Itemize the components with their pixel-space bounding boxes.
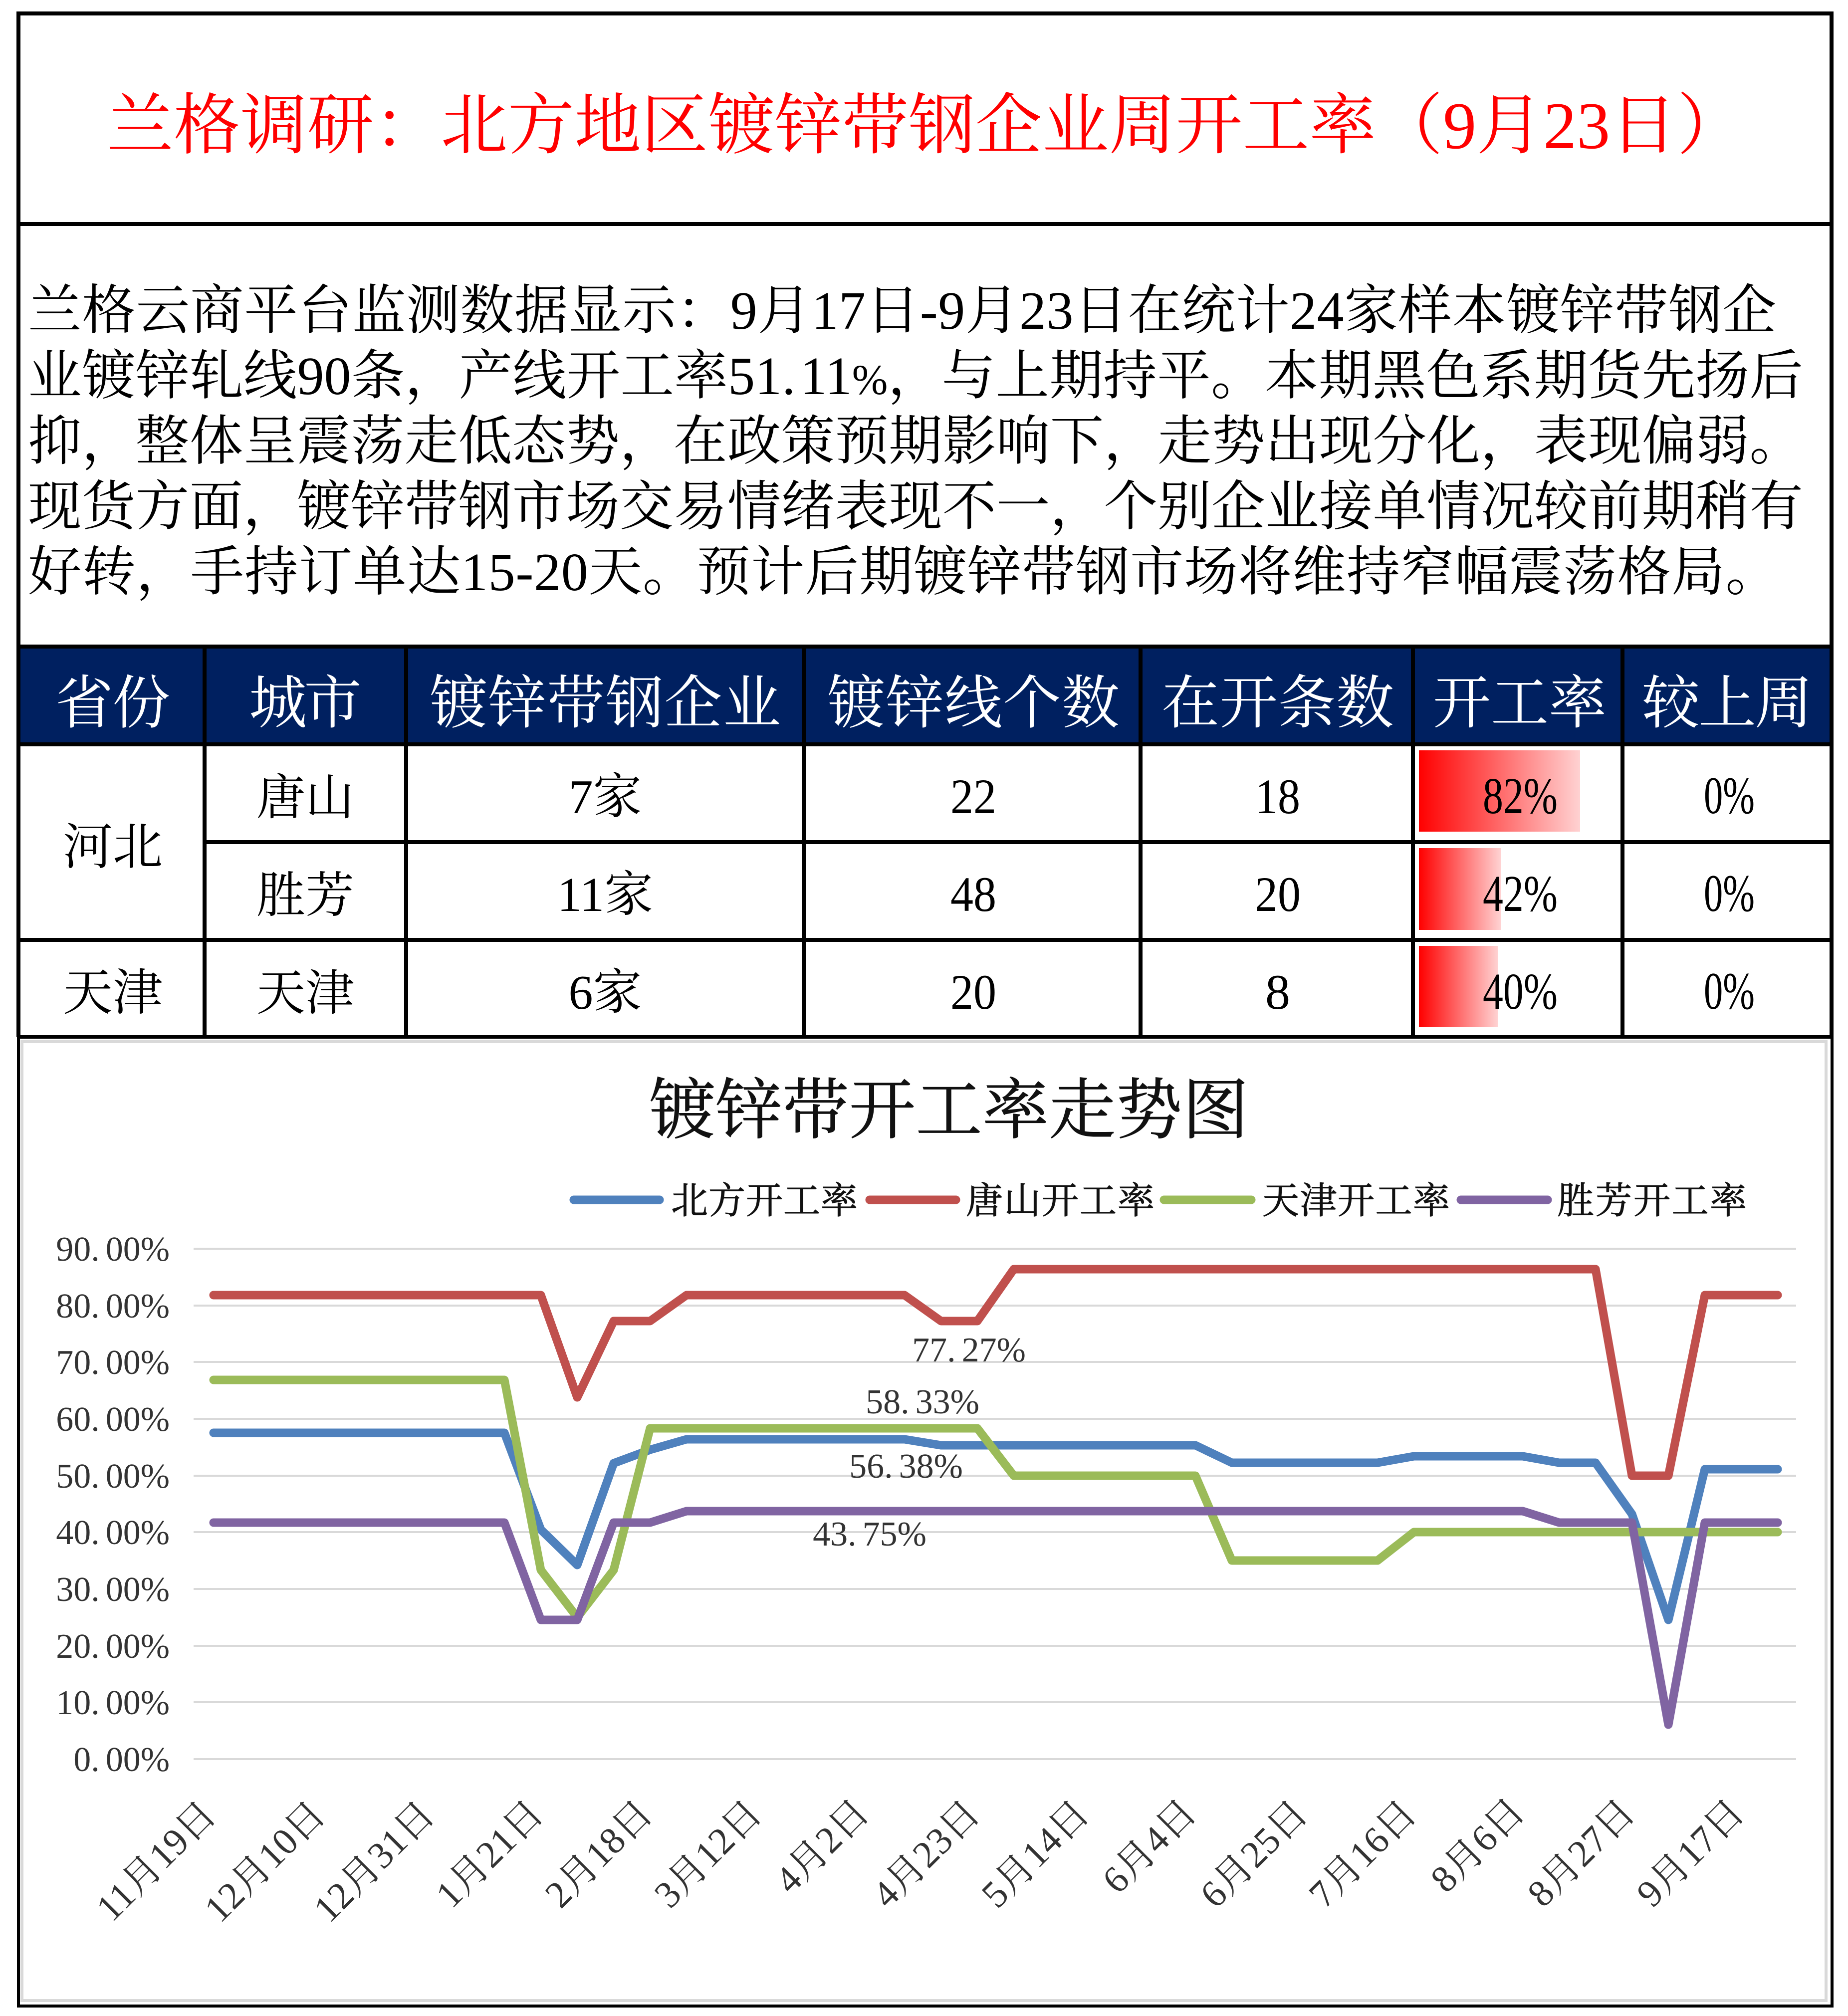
y axis labels: 90.00%: [56, 1230, 170, 1269]
x axis labels: 8月27日: [1520, 1792, 1643, 1915]
table header row: 镀锌线个数: [827, 672, 1120, 736]
title panel: [18, 13, 1832, 224]
y axis labels: 20.00%: [56, 1627, 170, 1666]
x axis labels: 6月4日: [1094, 1792, 1204, 1901]
table header row: 较上周: [1642, 672, 1813, 736]
y axis labels: [56, 1230, 170, 1779]
table rows text: 0%: [1704, 766, 1755, 825]
title: 兰格调研：北方地区镀锌带钢企业周开工率（9月23日）: [107, 89, 1744, 163]
table header row: 在开条数: [1161, 672, 1394, 736]
panel: summary text: [18, 224, 1832, 647]
table rows text: 河北: [63, 820, 163, 875]
x axis labels: 5月14日: [974, 1792, 1097, 1916]
table rows text: 20: [950, 964, 996, 1020]
table rows text: 40%: [1483, 963, 1558, 1020]
table rows text: 0%: [1704, 864, 1755, 922]
x axis labels: 12月10日: [197, 1793, 333, 1930]
table rows text: 天津: [256, 967, 354, 1021]
table rows text: 6家: [568, 966, 642, 1020]
summary paragraph: 业镀锌轧线90条，产线开工率51.11%，与上期持平。本期黑色系期货先扬后: [28, 347, 1803, 406]
legend: 北方开工率: [671, 1181, 858, 1222]
data labels: 58.33%: [866, 1383, 979, 1421]
x axis labels: [88, 1791, 1752, 1930]
table header row: 省份: [55, 672, 170, 736]
table rows text: 唐山: [256, 771, 354, 825]
chart title: 镀锌带开工率走势图: [649, 1074, 1249, 1147]
table rows text: 20: [1255, 867, 1301, 922]
x axis labels: 8月6日: [1422, 1791, 1533, 1900]
summary paragraph: 好转，手持订单达15-20天。预计后期镀锌带钢市场将维持窄幅震荡格局。: [28, 543, 1779, 602]
table rows text: 22: [950, 769, 996, 824]
y axis labels: 60.00%: [56, 1400, 170, 1439]
table rows text: 0%: [1704, 962, 1755, 1020]
legend: 唐山开工率: [966, 1181, 1155, 1222]
table rows text: 天津: [63, 965, 163, 1021]
x axis labels: 12月31日: [306, 1793, 443, 1930]
legend: 胜芳开工率: [1557, 1181, 1747, 1222]
table rows text: 8: [1265, 964, 1290, 1020]
data bars: [1419, 750, 1580, 1027]
x axis labels: 7月16日: [1301, 1792, 1424, 1916]
table header row: 城市: [249, 672, 362, 736]
table rows text: 胜芳: [256, 869, 354, 923]
table rows text: 7家: [568, 770, 642, 824]
table grid lines: [18, 647, 1832, 1037]
legend: [574, 1181, 1747, 1222]
x axis labels: 4月2日: [767, 1792, 877, 1901]
series: 天津开工率: [214, 1380, 1778, 1617]
y axis labels: 40.00%: [56, 1514, 170, 1552]
table header row: 镀锌带钢企业: [430, 672, 781, 736]
table: [18, 647, 1832, 1037]
x axis labels: 1月21日: [428, 1792, 551, 1916]
table header row: [18, 647, 1832, 744]
data labels: 56.38%: [849, 1447, 963, 1486]
table rows text: 11家: [557, 868, 653, 922]
summary paragraph: 兰格云商平台监测数据显示：9月17日-9月23日在统计24家样本镀锌带钢企: [28, 281, 1776, 341]
data labels: 77.27%: [912, 1331, 1026, 1369]
y axis labels: 70.00%: [56, 1344, 170, 1382]
summary paragraph: 现货方面，镀锌带钢市场交易情绪表现不一，个别企业接单情况较前期稍有: [28, 477, 1803, 537]
data labels: [813, 1331, 1026, 1554]
y axis labels: 30.00%: [56, 1570, 170, 1609]
gridlines: [194, 1249, 1796, 1759]
series: 北方开工率: [214, 1433, 1778, 1620]
table rows text: 82%: [1483, 767, 1558, 825]
summary paragraph: [28, 281, 1803, 602]
table rows text: 18: [1255, 769, 1300, 824]
series: 胜芳开工率: [214, 1511, 1778, 1725]
x axis labels: 3月12日: [647, 1792, 770, 1916]
table rows text: [63, 766, 1755, 1021]
y axis labels: 80.00%: [56, 1287, 170, 1326]
x axis labels: 11月19日: [88, 1793, 224, 1929]
data labels: 43.75%: [813, 1515, 926, 1554]
legend: 天津开工率: [1262, 1181, 1450, 1222]
x axis labels: 9月17日: [1629, 1792, 1752, 1915]
series: 唐山开工率: [214, 1269, 1778, 1476]
x axis labels: 6月25日: [1192, 1792, 1316, 1916]
y axis labels: 50.00%: [56, 1457, 170, 1496]
table header row: 开工率: [1433, 672, 1607, 736]
summary paragraph: 抑，整体呈震荡走低态势，在政策预期影响下，走势出现分化，表现偏弱。: [28, 412, 1803, 471]
x axis labels: 4月23日: [865, 1792, 988, 1916]
y axis labels: 10.00%: [56, 1684, 170, 1722]
x axis labels: 2月18日: [537, 1792, 661, 1916]
y axis labels: 0.00%: [73, 1741, 170, 1779]
table rows text: 48: [950, 867, 996, 922]
panel: line chart: [18, 1037, 1832, 2006]
table rows text: 42%: [1483, 865, 1558, 922]
